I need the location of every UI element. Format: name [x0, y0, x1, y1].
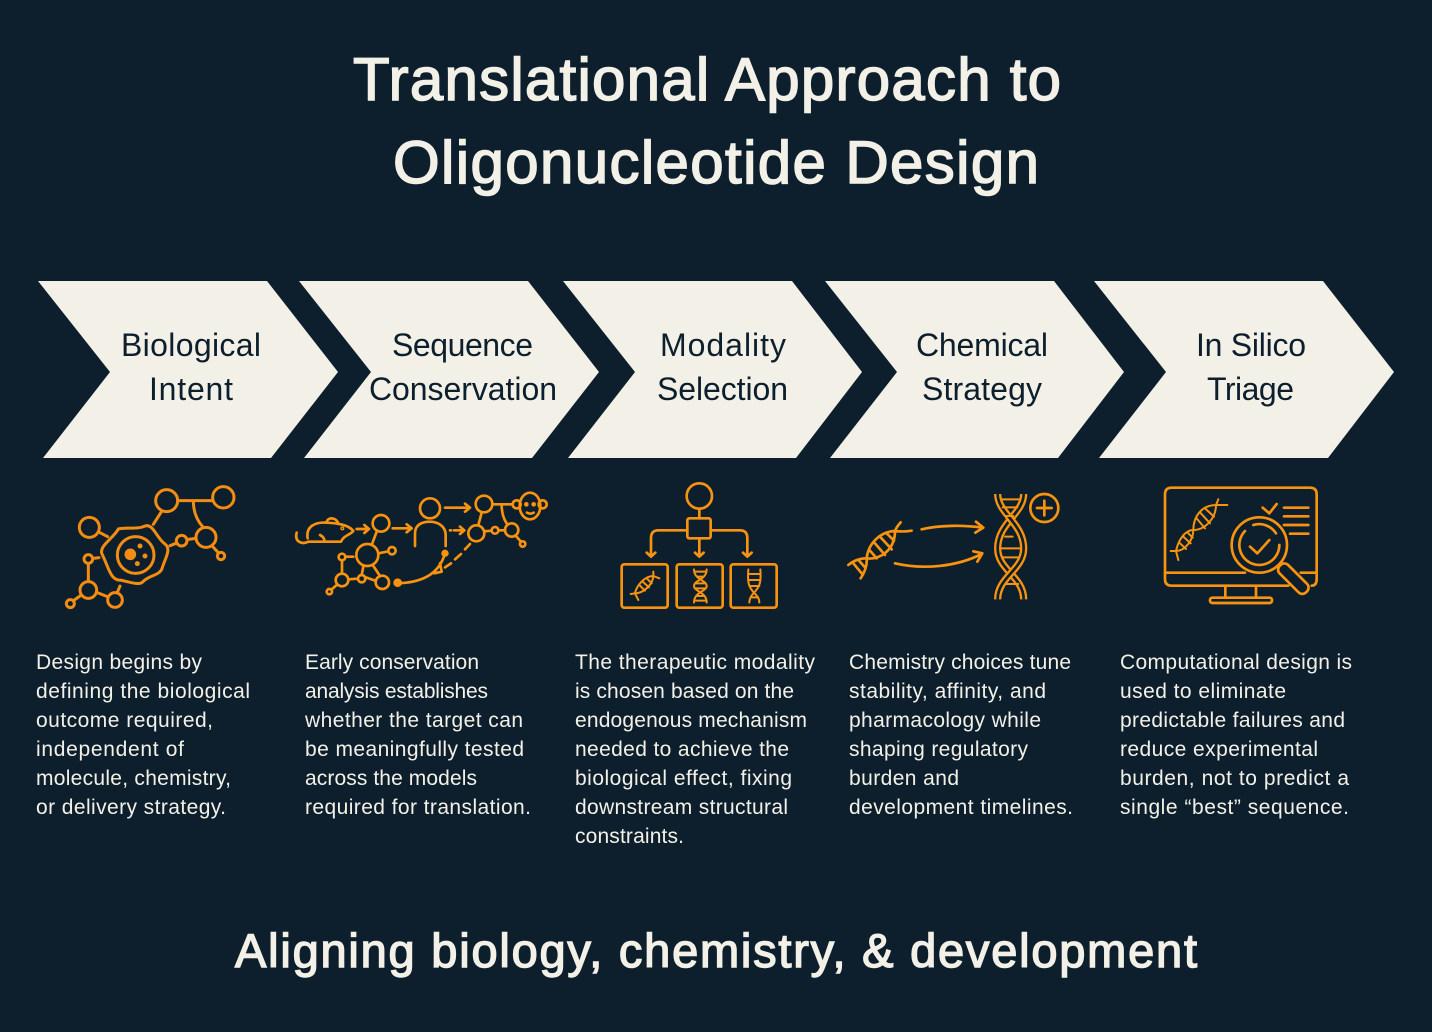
text block: Biological Intent description: independent of [36, 738, 184, 761]
text block: Biological Intent description: or delivery strategy. [36, 796, 226, 819]
icon: in silico triage monitor with magnifier [1165, 488, 1317, 603]
panel: step 2 chevron, Sequence Conservation [299, 281, 599, 458]
panel: step 5 chevron, In Silico Triage: Triage [1207, 371, 1294, 407]
text block: Chemical Strategy description [849, 651, 1073, 819]
text block: Biological Intent description: molecule, chemistry, [36, 767, 231, 790]
panel: step 1 chevron, Biological Intent: Biological [121, 327, 261, 363]
text block: Chemical Strategy description: Chemistry choices tune [849, 651, 1071, 674]
text block: In Silico Triage description: single “best” sequence. [1120, 796, 1349, 819]
text block: In Silico Triage description: used to eliminate [1120, 680, 1286, 703]
text block: Modality Selection description: is chosen based on the [575, 680, 794, 703]
panel: step 5 chevron, In Silico Triage: In Silico [1196, 327, 1306, 363]
text block: Modality Selection description [575, 651, 816, 848]
panel: step 2 chevron, Sequence Conservation: Conservation [369, 371, 557, 407]
panel: step 4 chevron, Chemical Strategy: Strategy [922, 371, 1042, 407]
text block: Chemical Strategy description: stability, affinity, and [849, 680, 1046, 703]
text block: Modality Selection description: biological effect, fixing [575, 767, 792, 790]
panel: step 3 chevron, Modality Selection: Selection [657, 371, 788, 407]
text block: Sequence Conservation description [304, 651, 531, 819]
title: Translational Approach to [353, 46, 1061, 113]
panel: step 4 chevron, Chemical Strategy: Chemical [916, 327, 1048, 363]
text block: Sequence Conservation description: whether the target can [304, 709, 523, 732]
text block: In Silico Triage description: Computational design is [1120, 651, 1352, 674]
text block: Biological Intent description: defining the biological [36, 680, 250, 703]
text block: Chemical Strategy description: shaping regulatory [849, 738, 1028, 761]
title [353, 46, 1061, 196]
panel: step 3 chevron, Modality Selection [563, 281, 862, 458]
text block: Sequence Conservation description: be meaningfully tested [305, 738, 524, 761]
text block: Sequence Conservation description: analysis establishes [305, 680, 488, 703]
text block: In Silico Triage description: burden, not to predict a [1120, 767, 1349, 790]
text block: Chemical Strategy description: development timelines. [849, 796, 1073, 819]
icon: cell with molecular network [66, 487, 234, 608]
text block: Biological Intent description: outcome required, [36, 709, 213, 732]
text block: Sequence Conservation description: Early conservation [305, 651, 479, 674]
text block: Modality Selection description: constraints. [575, 825, 684, 848]
text block: Modality Selection description: needed to achieve the [575, 738, 789, 761]
panel: step 4 chevron, Chemical Strategy [825, 281, 1124, 458]
text block: Modality Selection description: The therapeutic modality [575, 651, 816, 674]
panel: step 3 chevron, Modality Selection: Modality [660, 327, 786, 363]
text block: In Silico Triage description [1120, 651, 1352, 819]
text block: Sequence Conservation description: required for translation. [305, 796, 531, 819]
footer tagline: Aligning biology, chemistry, & development [235, 924, 1197, 977]
panel: step 5 chevron, In Silico Triage [1094, 281, 1394, 458]
panel: step 1 chevron, Biological Intent: Intent [149, 371, 233, 407]
text block: Modality Selection description: downstream structural [575, 796, 788, 819]
text block: Modality Selection description: endogenous mechanism [575, 709, 807, 732]
panel: step 2 chevron, Sequence Conservation: Sequence [392, 327, 533, 363]
text block: In Silico Triage description: predictable failures and [1120, 709, 1345, 732]
text block: Chemical Strategy description: burden and [849, 767, 959, 790]
text block: Biological Intent description: Design begins by [36, 651, 202, 674]
icon: chemical modification of DNA [848, 494, 1058, 599]
icon: species conservation network [296, 493, 547, 594]
title: Oligonucleotide Design [393, 129, 1039, 196]
text block: Chemical Strategy description: pharmacology while [849, 709, 1041, 732]
text block: In Silico Triage description: reduce experimental [1120, 738, 1318, 761]
text block: Sequence Conservation description: across the models [305, 767, 477, 790]
text block: Biological Intent description [36, 651, 250, 819]
icon: modality decision tree [622, 483, 777, 608]
panel: step 1 chevron, Biological Intent [38, 281, 338, 458]
